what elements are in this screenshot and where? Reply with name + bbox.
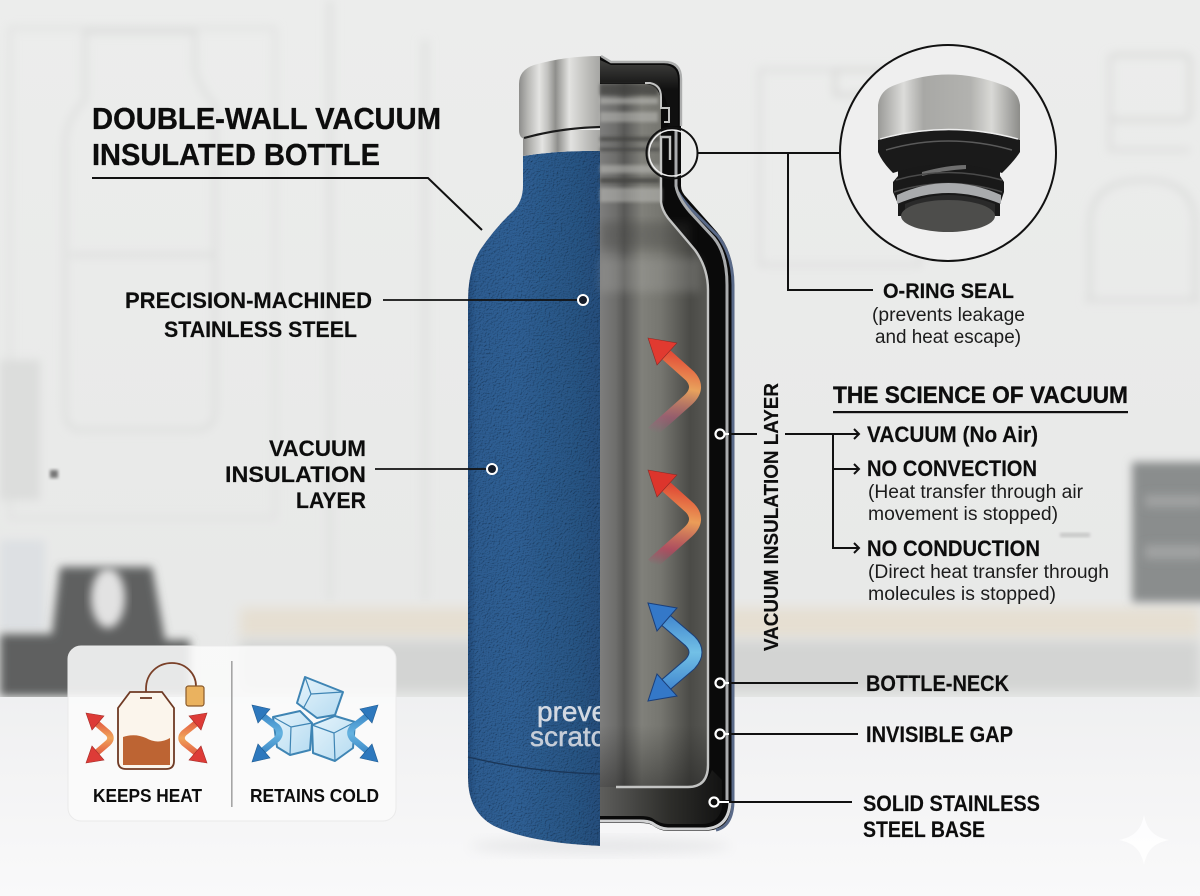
grey o-ring	[897, 183, 1001, 204]
section floor	[600, 770, 722, 824]
label: solid stainless steel base	[710, 791, 1040, 842]
no conduction: molecules is stopped)	[868, 584, 1056, 605]
no convection: (Heat transfer through air	[868, 482, 1084, 503]
neck thread bands	[600, 98, 662, 202]
branching arrows	[716, 429, 859, 553]
label: vacuum insulation layer: VACUUM	[269, 436, 366, 461]
cap seam	[524, 127, 600, 138]
label: vacuum insulation layer: INSULATION	[225, 462, 366, 487]
cold arrow	[648, 603, 696, 701]
black vacuum wall	[600, 56, 734, 831]
no convection	[867, 456, 1084, 525]
label: solid stainless steel base: STEEL BASE	[863, 817, 985, 842]
label: precision-machined stainless steel: PRECISION-MACHINED	[125, 288, 372, 313]
label: bottle-neck	[716, 671, 1009, 696]
science of vacuum panel	[716, 382, 1128, 605]
vertical label: vacuum insulation layer: VACUUM INSULATION LAYER	[761, 382, 783, 651]
title leader line	[92, 178, 482, 230]
top headspace	[600, 60, 678, 126]
icon: cold arrows	[252, 705, 378, 762]
section bottom outer line	[600, 802, 730, 829]
label: vacuum insulation layer: LAYER	[296, 488, 366, 513]
no conduction: NO CONDUCTION	[867, 536, 1040, 561]
label: solid stainless steel base: SOLID STAINLESS	[863, 791, 1040, 816]
label: vacuum insulation layer	[225, 436, 497, 513]
panel divider	[231, 661, 233, 807]
bottom band	[905, 195, 995, 216]
inner wall outline	[616, 137, 708, 787]
label: o-ring seal: and heat escape)	[875, 327, 1021, 348]
icon: sparkle watermark	[1119, 815, 1169, 865]
icon: tea bag	[118, 663, 204, 769]
steel cap	[519, 56, 600, 139]
blue powder-coated body	[468, 151, 600, 846]
label: o-ring seal: (prevents leakage	[872, 305, 1025, 326]
blue-grey outer shell edge	[678, 192, 733, 830]
printed bottle text, cut by section	[530, 706, 600, 746]
label: precision-machined stainless steel	[125, 288, 588, 342]
icon: heat arrows	[86, 713, 207, 763]
title	[92, 101, 441, 172]
no conduction: (Direct heat transfer through	[868, 562, 1109, 583]
bottle: exterior left half	[468, 56, 600, 846]
printed bottle text, cut by section: prevent	[537, 696, 631, 727]
plug highlights	[922, 165, 966, 176]
no conduction	[867, 536, 1109, 605]
stainless cap top	[878, 74, 1020, 140]
heat arrow middle	[648, 470, 695, 564]
label: precision-machined stainless steel: STAINLESS STEEL	[164, 317, 357, 342]
label: retains cold: RETAINS COLD	[250, 786, 379, 806]
neck lip outline	[645, 83, 669, 122]
steel collar	[523, 130, 600, 156]
printed bottle text, cut by section: scratches	[530, 721, 650, 752]
base seam	[468, 757, 600, 774]
label: o-ring seal: O-RING SEAL	[883, 280, 1014, 303]
flask bottom shading	[600, 725, 708, 787]
lower plug body	[893, 160, 1004, 216]
label: invisible gap: INVISIBLE GAP	[866, 722, 1013, 747]
heading: THE SCIENCE OF VACUUM	[833, 382, 1128, 409]
title: INSULATED BOTTLE	[92, 137, 380, 172]
cap bottom disc	[901, 200, 995, 232]
black flange	[878, 130, 1020, 173]
icon: ice cubes	[273, 677, 355, 761]
label: bottle-neck: BOTTLE-NECK	[866, 671, 1009, 696]
panel: keeps heat / retains cold	[68, 646, 396, 821]
o-ring callout: magnifier ring and leader	[646, 128, 873, 290]
label: invisible gap	[716, 722, 1013, 747]
heat arrow upper	[648, 338, 695, 432]
title: DOUBLE-WALL VACUUM	[92, 101, 441, 136]
top outer line	[601, 56, 681, 126]
label: o-ring seal	[872, 280, 1025, 348]
inner flask metal	[600, 84, 708, 800]
no convection: NO CONVECTION	[867, 456, 1037, 481]
label: keeps heat: KEEPS HEAT	[93, 786, 202, 806]
detail circle: bottle cap with o-ring	[840, 45, 1056, 261]
no convection: movement is stopped)	[868, 504, 1058, 525]
vacuum no air: VACUUM (No Air)	[867, 422, 1038, 447]
outer wall light line	[676, 130, 727, 800]
bottle: cross-section right half	[600, 56, 734, 831]
shoulder soft shade	[600, 222, 690, 248]
